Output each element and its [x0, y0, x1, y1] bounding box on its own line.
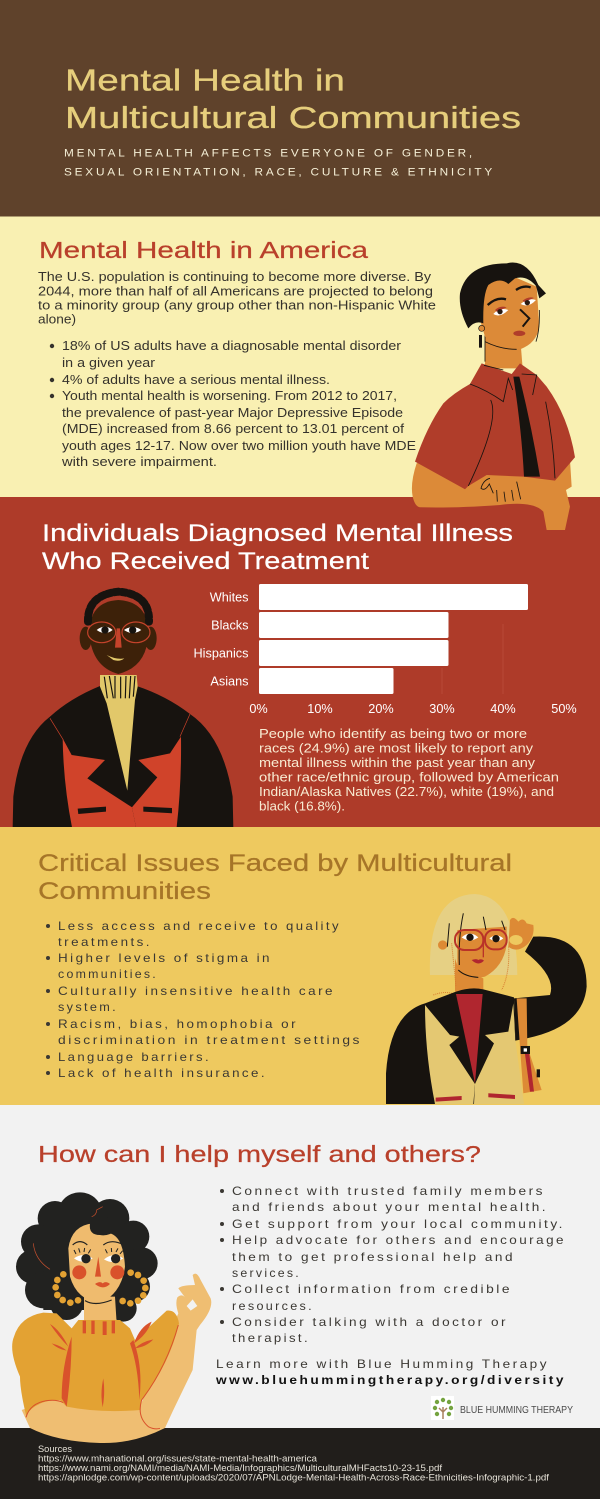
heading: critical issues: Critical Issues Faced by Multicultural: [38, 850, 512, 877]
bullet list: statistics: [50, 338, 416, 469]
illustration: man with glasses and black jacket: [13, 592, 233, 827]
bullet list: issues: [46, 919, 362, 1080]
text block: sources: [38, 1444, 550, 1482]
bullet list: statistics: (MDE) increased from 8.66 percent to 13.01 percent of: [62, 421, 404, 436]
bullet list: issues: Higher levels of stigma in: [58, 951, 272, 965]
bar chart: treatment by race: 0%: [249, 702, 268, 716]
bar chart: treatment by race: 10%: [307, 702, 333, 716]
text block: two or more races: mental illness within the past year than any: [259, 756, 536, 770]
illustration: woman with curly hair and hoop earrings: [12, 1192, 211, 1443]
bullet list: issues: system.: [58, 1000, 118, 1014]
text block: sources: https://www.nami.org/NAMI/media/NAMI-Media/Infographics/MulticulturalMHFacts10-23-15.pdf: [38, 1463, 443, 1473]
panel: how can I help: [0, 1105, 600, 1443]
heading: how can I help: How can I help myself and others?: [38, 1141, 481, 1167]
text block: two or more races: black (16.8%).: [259, 800, 345, 814]
call to action: learn more: www.bluehummingtherapy.org/diversity: [215, 1373, 566, 1387]
bar chart: treatment by race: Blacks: [211, 618, 248, 632]
subtitle: MENTAL HEALTH AFFECTS EVERYONE OF GENDER,: [64, 148, 475, 160]
bullet list: statistics: youth ages 12-17. Now over two million youth have MDE: [62, 438, 416, 453]
heading: mental health in America: Mental Health in America: [39, 237, 369, 263]
text block: two or more races: races (24.9%) are most likely to report any: [259, 742, 534, 756]
bullet list: actions: Connect with trusted family members: [232, 1184, 545, 1198]
title: [65, 64, 521, 135]
subtitle: [64, 148, 495, 178]
title: Multicultural Communities: [65, 101, 521, 135]
bullet list: statistics: in a given year: [62, 355, 156, 370]
bullet list: actions: and friends about your mental health.: [232, 1200, 548, 1214]
bullet list: issues: discrimination in treatment settings: [58, 1033, 362, 1047]
heading: individuals diagnosed: Who Received Treatment: [42, 548, 369, 575]
call to action: learn more: [215, 1357, 566, 1387]
logo: Blue Humming Therapy: BLUE HUMMING THERAPY: [460, 1405, 573, 1416]
bar chart: treatment by race: Whites: [210, 590, 248, 604]
bullet list: statistics: with severe impairment.: [61, 454, 217, 469]
logo: Blue Humming Therapy: [431, 1396, 573, 1420]
bullet list: statistics: the prevalence of past-year Major Depressive Episode: [62, 405, 403, 420]
bullet list: issues: Language barriers.: [58, 1050, 211, 1064]
panel: treatment chart section: [0, 497, 600, 827]
bar chart: treatment by race: Hispanics: [194, 646, 248, 660]
bar chart: treatment by race: 20%: [368, 702, 394, 716]
text block: population intro: alone): [38, 312, 76, 326]
bullet list: statistics: Youth mental health is worsening. From 2012 to 2017,: [62, 388, 397, 403]
text block: two or more races: People who identify as being two or more: [259, 727, 527, 741]
bar chart: treatment by race: Asians: [210, 674, 248, 688]
bar chart: treatment by race: 40%: [490, 702, 516, 716]
bullet list: actions: Consider talking with a doctor or: [232, 1315, 508, 1329]
bullet list: statistics: 18% of US adults have a diagnosable mental disorder: [62, 338, 402, 353]
illustration: person in red shirt and black tie: [412, 263, 575, 530]
heading: critical issues: Communities: [38, 878, 211, 905]
panel: critical issues: [0, 827, 600, 1105]
text block: sources: https://apnlodge.com/wp-content/uploads/2020/07/APNLodge-Mental-Health-Across-Race-Ethnicities-Infographic-1.pdf: [38, 1472, 550, 1482]
heading: critical issues: [38, 850, 512, 905]
call to action: learn more: Learn more with Blue Humming Therapy: [216, 1357, 549, 1371]
bullet list: issues: Culturally insensitive health care: [58, 984, 335, 998]
text block: sources: https://www.mhanational.org/issues/state-mental-health-america: [38, 1454, 317, 1464]
text block: two or more races: Indian/Alaska Natives (22.7%), white (19%), and: [259, 785, 554, 799]
bullet list: issues: communities.: [58, 967, 158, 981]
text block: two or more races: [259, 727, 559, 814]
heading: individuals diagnosed: Individuals Diagnosed Mental Illness: [42, 520, 513, 547]
panel: header: [0, 0, 600, 216]
bullet list: actions: Get support from your local community.: [232, 1217, 565, 1231]
subtitle: SEXUAL ORIENTATION, RACE, CULTURE & ETHNICITY: [64, 166, 495, 178]
illustration: woman adjusting red glasses: [386, 894, 587, 1104]
bullet list: actions: Collect information from credible: [232, 1282, 512, 1296]
text block: sources: Sources: [38, 1444, 72, 1454]
bullet list: actions: them to get professional help and: [232, 1250, 515, 1264]
text block: population intro: The U.S. population is continuing to become more diverse. By: [38, 269, 432, 284]
title: Mental Health in: [65, 64, 345, 98]
bar chart: treatment by race: 50%: [551, 702, 577, 716]
text block: population intro: [38, 269, 436, 326]
text block: population intro: 2044, more than half of all Americans are projected to belong: [38, 284, 433, 298]
bar chart: treatment by race: [194, 584, 577, 716]
heading: individuals diagnosed: [42, 520, 513, 575]
text block: population intro: to a minority group (any group other than non-Hispanic White: [38, 298, 436, 312]
bullet list: actions: [220, 1184, 566, 1345]
bullet list: actions: services.: [232, 1266, 301, 1280]
bullet list: statistics: 4% of adults have a serious mental illness.: [62, 372, 330, 387]
panel: mental health in America: [0, 216, 600, 530]
panel: sources footer: [0, 1428, 600, 1499]
bullet list: issues: Racism, bias, homophobia or: [58, 1017, 298, 1031]
text block: two or more races: other race/ethnic group, followed by American: [259, 770, 559, 784]
bullet list: issues: treatments.: [58, 935, 152, 949]
bullet list: issues: Less access and receive to quality: [58, 919, 341, 933]
bar chart: treatment by race: 30%: [429, 702, 455, 716]
bullet list: actions: resources.: [232, 1299, 314, 1313]
bullet list: actions: therapist.: [232, 1331, 310, 1345]
bullet list: issues: Lack of health insurance.: [58, 1066, 267, 1080]
bullet list: actions: Help advocate for others and encourage: [232, 1233, 566, 1247]
